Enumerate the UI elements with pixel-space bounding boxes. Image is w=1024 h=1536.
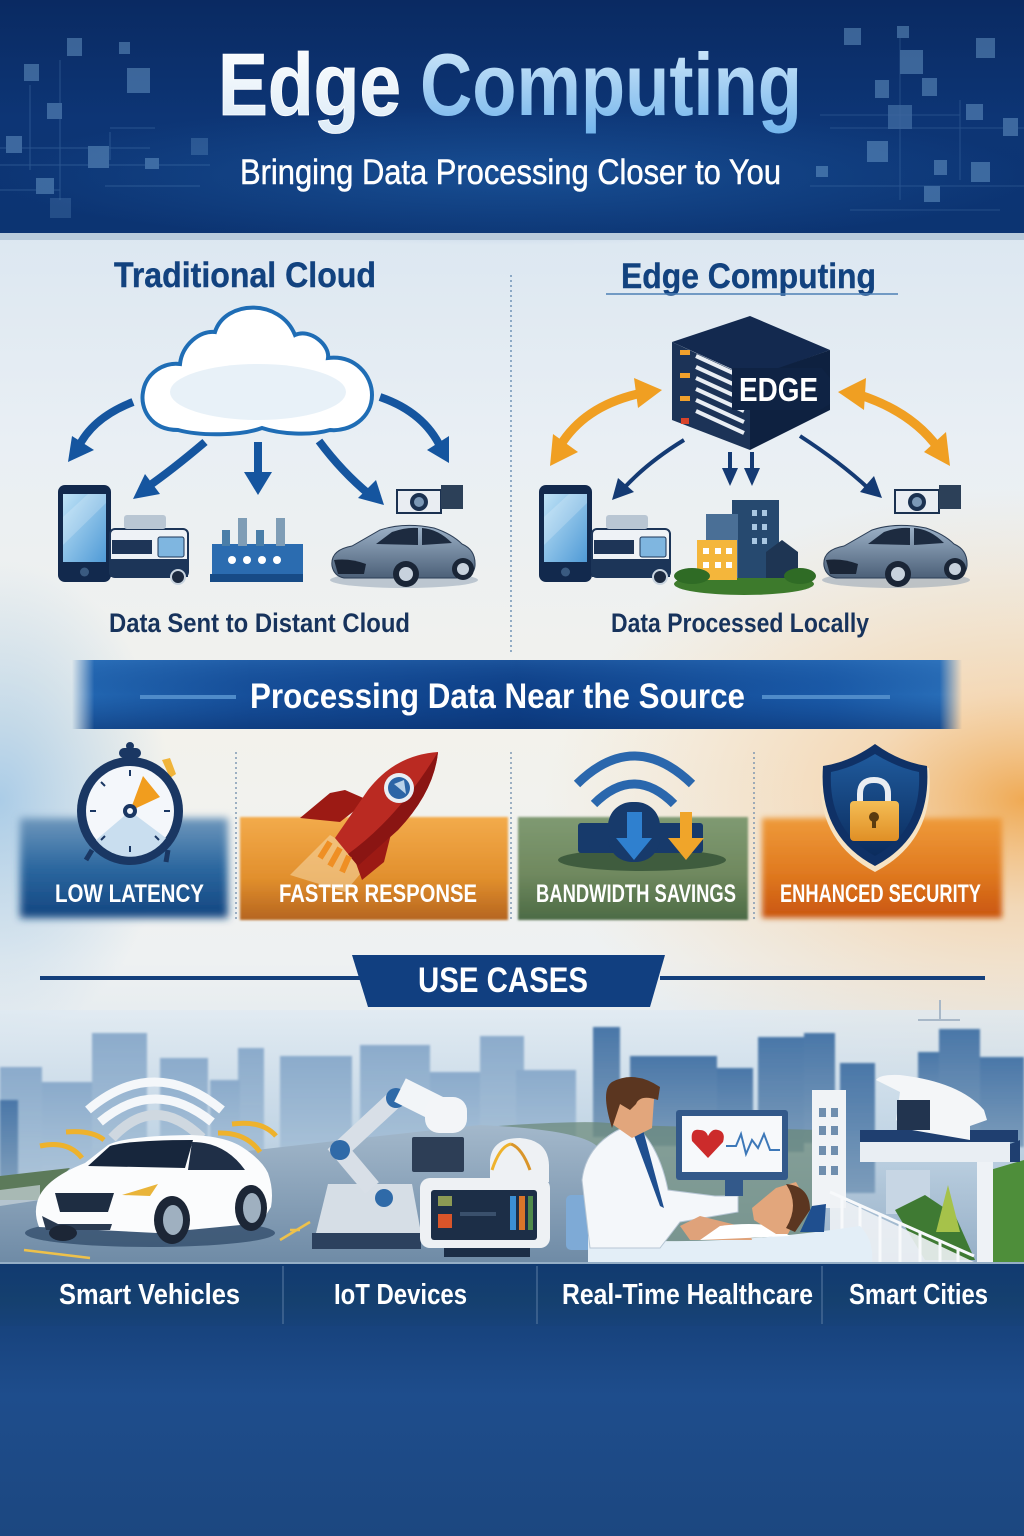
icon: camera <box>397 485 463 513</box>
icon: van <box>110 515 188 584</box>
icon: stopwatch <box>77 742 183 865</box>
illustration: smart city <box>812 1000 1024 1262</box>
arrows: navy local <box>612 436 882 500</box>
label: EDGE: EDGE <box>739 371 818 408</box>
panel: edge computing <box>539 257 970 638</box>
illustration: robot arm and controller <box>312 1088 550 1257</box>
header band <box>0 0 1024 245</box>
label: FASTER RESPONSE <box>279 880 477 908</box>
heading: edge computing: Edge Computing <box>621 257 876 296</box>
arrows: orange two-way <box>550 378 950 466</box>
scene: city background <box>0 1010 1024 1265</box>
icon: phone <box>539 485 592 582</box>
icon: factory <box>210 518 303 582</box>
use cases rule <box>40 976 985 980</box>
panel: low latency <box>20 742 228 918</box>
icon: phone <box>58 485 111 582</box>
panel: traditional cloud <box>58 256 478 638</box>
caption: edge computing: Data Processed Locally <box>611 608 869 638</box>
icon: camera <box>895 485 961 513</box>
title: Computing <box>420 35 802 134</box>
label: real-time healthcare: Real-Time Healthcare <box>562 1279 813 1311</box>
icon: shield with lock <box>820 744 930 872</box>
icon: rocket <box>290 752 438 892</box>
icon: EDGE server <box>672 316 830 450</box>
panel: faster response <box>240 752 508 920</box>
arrows: cloud to devices <box>68 397 449 505</box>
label bar: use cases <box>0 1264 1024 1326</box>
banner: processing data near the source <box>72 660 962 729</box>
icon: cloud <box>142 308 372 434</box>
dotted dividers <box>236 752 754 920</box>
use cases ribbon <box>352 955 665 1007</box>
caption: traditional cloud: Data Sent to Distant Cloud <box>109 608 410 638</box>
label: iot devices: IoT Devices <box>334 1279 467 1311</box>
banner text: Processing Data Near the Source <box>250 677 745 716</box>
title underline <box>205 142 825 146</box>
center divider <box>510 275 512 655</box>
label: BANDWIDTH SAVINGS <box>536 880 736 908</box>
circuit decoration left <box>0 38 210 218</box>
title: Edge <box>218 35 401 134</box>
heading: traditional cloud: Traditional Cloud <box>114 256 376 295</box>
title <box>218 35 802 134</box>
icon: wifi and arrows <box>558 756 726 871</box>
illustration: doctor and patient <box>566 1077 872 1262</box>
icon: car <box>822 525 970 588</box>
panel: bandwidth savings <box>518 756 748 920</box>
label: smart vehicles: Smart Vehicles <box>59 1279 240 1311</box>
label: smart cities: Smart Cities <box>849 1279 988 1311</box>
icon: buildings <box>674 500 816 595</box>
illustration: smart vehicle <box>25 1082 276 1247</box>
icon: van <box>592 515 670 584</box>
circuit decoration right <box>810 26 1024 210</box>
ribbon text: USE CASES <box>418 961 588 1000</box>
subtitle: Bringing Data Processing Closer to You <box>240 153 781 192</box>
icon: car <box>330 525 478 588</box>
label: LOW LATENCY <box>55 880 204 908</box>
panel: enhanced security <box>762 744 1002 918</box>
